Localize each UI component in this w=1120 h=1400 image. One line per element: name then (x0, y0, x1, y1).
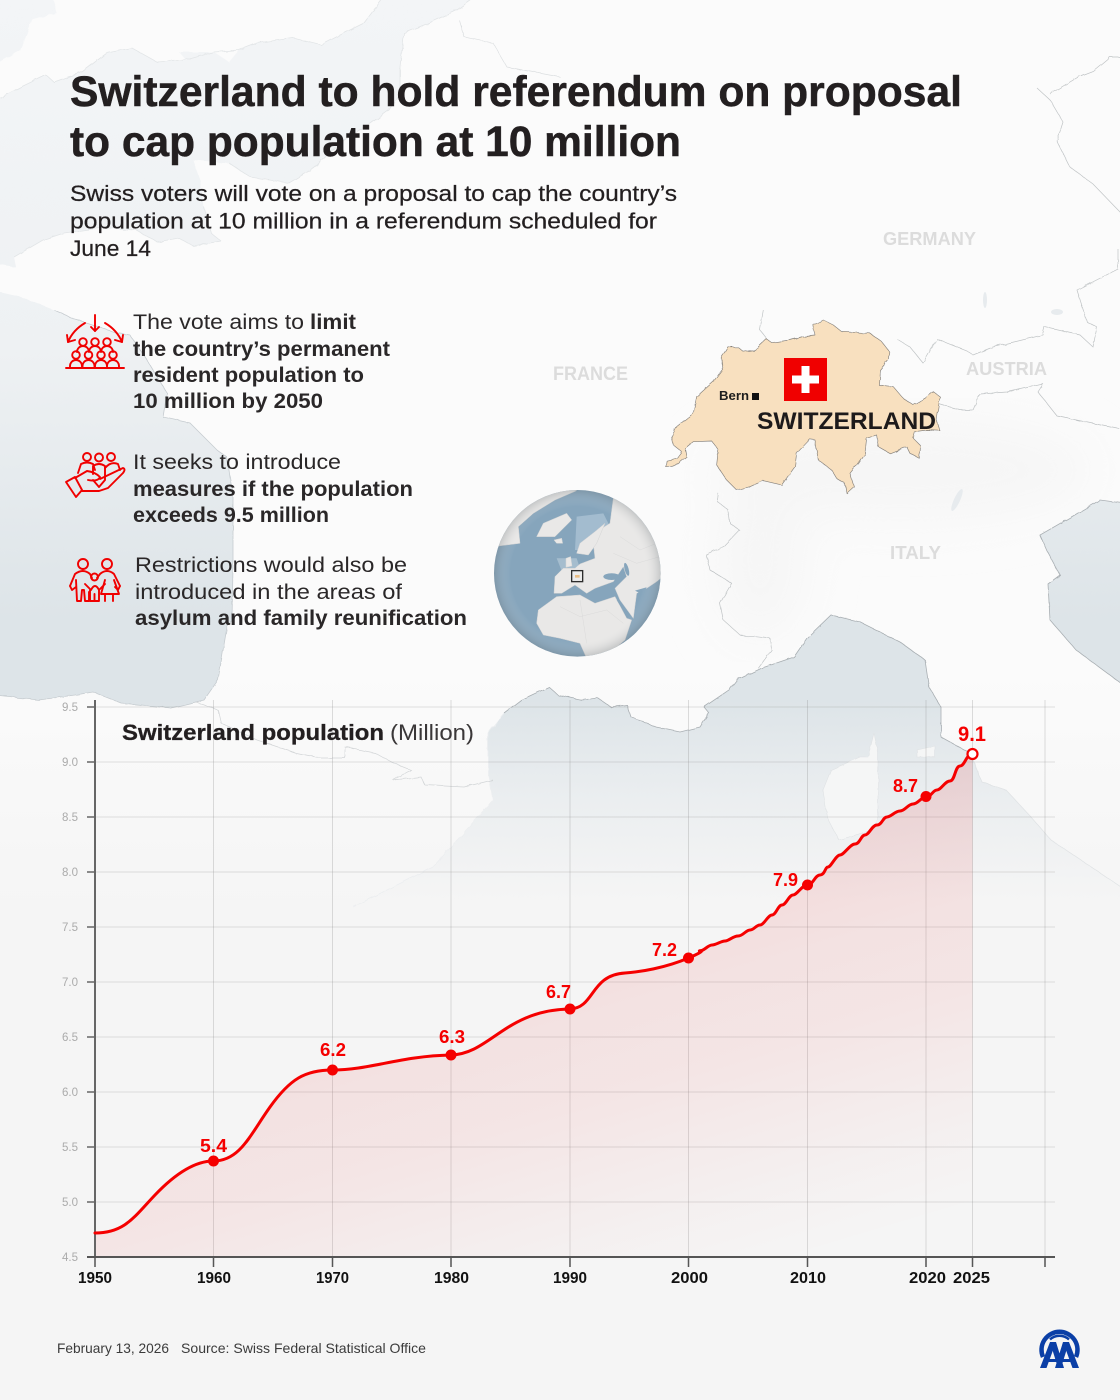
text: measures: exceeds 9.5 million (133, 503, 329, 527)
data labels: 8.7 (893, 776, 918, 796)
data labels: 7.2 (652, 940, 677, 960)
data labels: 7.9 (773, 870, 798, 890)
subtitle: population at 10 million in a referendum scheduled for (70, 208, 658, 234)
data labels (200, 722, 986, 1156)
text: measures: measures if the population (133, 477, 413, 501)
subtitle (70, 181, 677, 261)
x axis labels: 2020 (909, 1270, 946, 1287)
y axis labels (62, 702, 78, 1264)
text: limit population: limit (310, 310, 356, 334)
alpine terrain shading (710, 420, 1090, 640)
x axis labels: 2025 (953, 1270, 990, 1287)
footer date and source (57, 1340, 426, 1356)
x axis labels: 2010 (790, 1270, 826, 1287)
text: restrictions: asylum and family reunification (135, 606, 467, 630)
chart title: Switzerland population (122, 720, 384, 745)
country label: Italy: ITALY (890, 543, 941, 563)
lakes (685, 292, 1063, 512)
y axis labels: 6.0 (62, 1087, 78, 1099)
y axis labels: 7.5 (62, 922, 78, 934)
text: limit population: resident population to (133, 363, 364, 387)
locator globe (494, 490, 661, 657)
icon: hand holding people (66, 453, 124, 497)
x axis labels: 1950 (78, 1270, 112, 1287)
country label: France: FRANCE (553, 364, 628, 385)
x axis labels: 1980 (434, 1270, 469, 1287)
y axis labels: 7.0 (62, 977, 78, 989)
title (70, 68, 962, 166)
x axis (87, 1257, 1055, 1267)
country label: Germany: GERMANY (883, 229, 976, 249)
capital label: Bern: Bern (719, 389, 749, 403)
icon: family (70, 559, 120, 601)
data labels: 9.1 (958, 722, 986, 746)
population line (95, 754, 972, 1233)
text: restrictions: introduced in the areas of (135, 580, 402, 604)
text: limit population (133, 310, 390, 413)
data labels: 6.3 (439, 1027, 465, 1047)
text: limit population: The vote aims to (133, 310, 304, 334)
chart title (122, 720, 474, 745)
locator square (572, 571, 583, 582)
x axis labels: 1970 (316, 1270, 349, 1287)
x axis labels: 2000 (671, 1270, 708, 1287)
data labels: 5.4 (200, 1136, 227, 1156)
subtitle: Swiss voters will vote on a proposal to cap the country’s (70, 181, 677, 206)
footer date and source: February 13, 2026 (57, 1340, 169, 1356)
flag of Switzerland (784, 358, 827, 401)
data labels: 6.2 (320, 1040, 346, 1060)
line chart: Switzerland population (62, 700, 1055, 1287)
y axis labels: 5.0 (62, 1197, 78, 1209)
text: limit population: the country’s permanent (133, 337, 390, 361)
y axis labels: 9.0 (62, 757, 78, 769)
coastlines (0, 0, 1120, 907)
y axis labels: 6.5 (62, 1032, 78, 1044)
chart grid (95, 700, 1055, 1257)
panel: Switzerland map (666, 320, 940, 493)
title: to cap population at 10 million (70, 118, 681, 166)
text: restrictions (135, 553, 467, 630)
y axis labels: 4.5 (62, 1252, 78, 1264)
text: measures: It seeks to introduce (133, 450, 341, 474)
country shape: Switzerland (666, 320, 940, 493)
islands (823, 733, 935, 840)
data labels: 6.7 (546, 982, 571, 1002)
country borders (196, 20, 1120, 787)
x axis labels: 1960 (197, 1270, 231, 1287)
icon: crowd with arrows (66, 315, 124, 368)
y axis labels: 8.0 (62, 867, 78, 879)
country label: Austria: AUSTRIA (966, 359, 1047, 379)
data points (208, 749, 978, 1166)
subtitle: June 14 (70, 236, 151, 261)
country label: Switzerland: SWITZERLAND (757, 408, 936, 435)
seas (0, 0, 1120, 1010)
chart title: (Million) (390, 720, 474, 745)
x axis labels: 1990 (553, 1270, 587, 1287)
y axis (87, 700, 95, 1257)
footer date and source: Source: Swiss Federal Statistical Office (181, 1340, 426, 1356)
y axis labels: 8.5 (62, 812, 78, 824)
logo: Anadolu Agency (1040, 1332, 1079, 1368)
title: Switzerland to hold referendum on proposal (70, 68, 962, 116)
area under curve (95, 754, 972, 1257)
y axis labels: 9.5 (62, 702, 78, 714)
x axis labels (78, 1270, 990, 1287)
text: limit population: 10 million by 2050 (133, 389, 323, 413)
text: restrictions: Restrictions would also be (135, 553, 407, 577)
y axis labels: 5.5 (62, 1142, 78, 1154)
text: measures (133, 450, 413, 527)
